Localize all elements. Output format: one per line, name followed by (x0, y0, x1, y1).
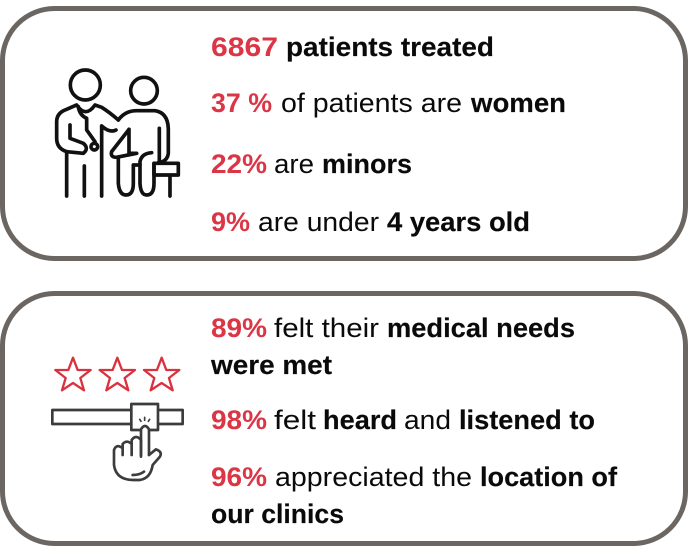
stat: under 4 years old: are under (258, 207, 379, 237)
stat: women: women (470, 88, 566, 118)
stat: location of clinics: appreciated the (275, 462, 472, 492)
stat: felt heard: heard (323, 405, 397, 435)
stat: medical needs met: 89% (211, 313, 267, 343)
stat: medical needs met: medical needs (387, 313, 575, 343)
icon: three stars and slider with hand (52, 358, 183, 480)
stat: medical needs met: felt their (274, 313, 379, 343)
stat: felt heard: 98% (211, 405, 267, 435)
stat: felt heard: felt (274, 405, 317, 435)
stat: location of clinics: location of (480, 462, 618, 492)
stat: felt heard: listened to (459, 405, 595, 435)
panel: patient satisfaction (2, 294, 686, 544)
stat: women: of patients are (281, 88, 462, 118)
icon: doctor and patient (57, 70, 178, 196)
stat: women: 37 % (211, 88, 272, 118)
stat: medical needs met (210, 313, 575, 380)
panel: patient demographics (2, 8, 686, 258)
stat: minors: are (274, 149, 314, 179)
stat: patients treated: 6867 (211, 32, 278, 62)
stat: under 4 years old: 4 years old (387, 207, 530, 237)
stat: felt heard (211, 405, 595, 435)
stat: minors (211, 149, 412, 179)
stat: location of clinics (211, 462, 618, 529)
stat: felt heard: and (404, 405, 451, 435)
stat: location of clinics: our clinics (211, 499, 344, 529)
stat: minors: minors (322, 149, 412, 179)
stat: minors: 22% (211, 149, 267, 179)
stat: under 4 years old: 9% (211, 207, 250, 237)
stat: under 4 years old (211, 207, 530, 237)
stat: medical needs met: were met (210, 350, 332, 380)
stat: women (211, 88, 566, 118)
stat: location of clinics: 96% (211, 462, 267, 492)
stat: patients treated: patients treated (286, 32, 494, 62)
